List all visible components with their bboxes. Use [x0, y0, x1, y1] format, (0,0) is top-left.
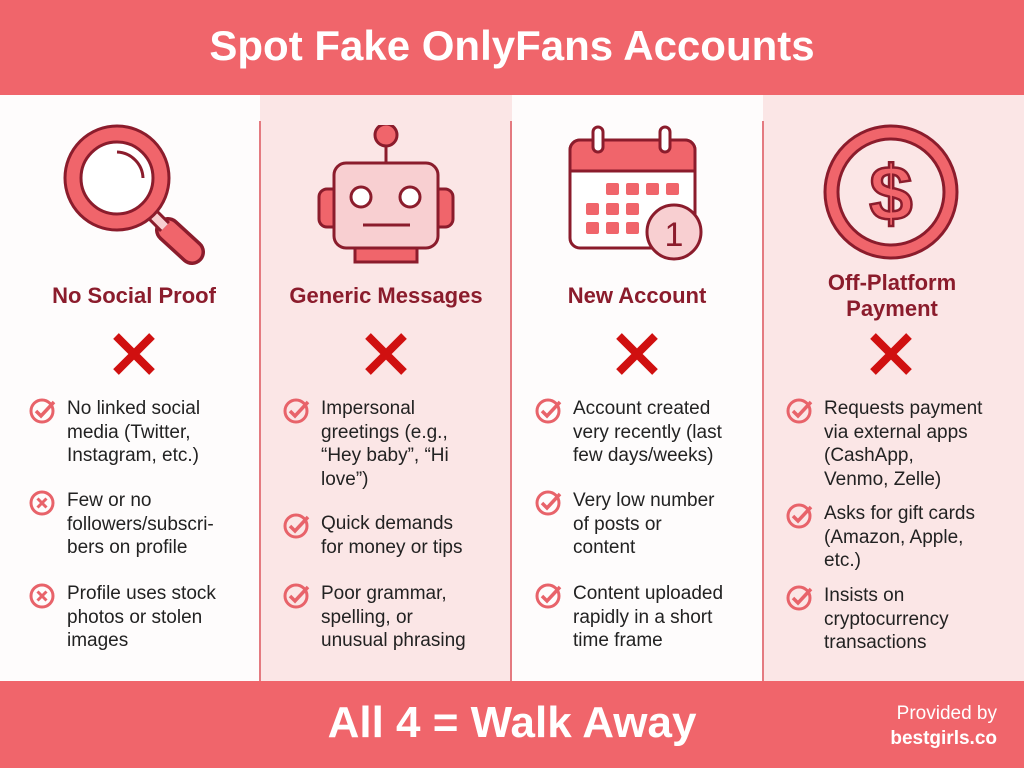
icon: robot — [318, 125, 454, 264]
bullets col 2: love”) — [321, 468, 369, 490]
text: unusual phrasing — [321, 630, 466, 651]
bullets col 2: greetings (e.g., — [321, 422, 448, 442]
header bar: Spot Fake OnlyFans Accounts — [209, 22, 815, 69]
text: Asks for gift cards — [824, 503, 975, 524]
footer slogan: All 4 = Walk Away — [328, 698, 696, 747]
bullets col 1: No linked social — [67, 398, 200, 419]
icon: X 4 — [870, 333, 912, 375]
heading: Off-Platform Payment — [828, 270, 956, 321]
bullets col 2: “Hey baby”, “Hi — [321, 445, 449, 466]
bullets col 3: very recently (last — [573, 422, 722, 442]
text: transactions — [824, 632, 926, 653]
credit — [890, 703, 997, 749]
header bar — [0, 0, 1024, 95]
bullets col 1: media (Twitter, — [67, 422, 191, 442]
heading: New Account: New Account — [568, 283, 706, 308]
text: etc.) — [824, 550, 861, 571]
text: content — [573, 537, 635, 558]
icon: calendar — [568, 126, 702, 260]
text: spelling, or — [321, 606, 413, 628]
text: of posts or — [573, 514, 662, 534]
bullets col 3 — [536, 398, 722, 466]
icon: X 3 — [616, 333, 658, 375]
text: followers/subscri- — [67, 514, 214, 534]
bullets col 3: few days/weeks) — [573, 445, 713, 466]
text: (Amazon, Apple, — [824, 526, 963, 548]
footer bar — [0, 681, 1024, 768]
icon: dollar coin — [824, 124, 958, 260]
text: Quick demands — [321, 513, 453, 534]
bullets col 2 — [284, 398, 449, 490]
bullets col 2: Impersonal — [321, 398, 415, 419]
icon: X 1 — [113, 333, 155, 375]
text: Insists on — [824, 585, 904, 606]
text: cryptocurrency — [824, 608, 949, 630]
text: for money or tips — [321, 536, 462, 558]
icon: dollar coin: $ — [869, 149, 913, 237]
bullets col 4 — [786, 398, 982, 490]
text: Very low number — [573, 490, 715, 511]
icon: calendar: 1 — [665, 216, 683, 254]
heading: No Social Proof: No Social Proof — [52, 283, 216, 308]
text: rapidly in a short — [573, 606, 712, 628]
text: Content uploaded — [573, 583, 723, 604]
bullets col 4: (CashApp, — [824, 445, 914, 466]
bullets col 3: Account created — [573, 398, 710, 419]
icon: X 2 — [365, 333, 407, 375]
text: images — [67, 630, 128, 651]
text: time frame — [573, 630, 663, 651]
bullets col 4: Venmo, Zelle) — [824, 468, 941, 490]
bullets col 1 — [30, 398, 200, 466]
bullets col 4: Requests payment — [824, 398, 982, 419]
text: Few or no — [67, 490, 151, 511]
heading: Off-Platform Payment: Off-Platform — [828, 270, 956, 295]
bullets col 4: via external apps — [824, 422, 968, 442]
heading: Generic Messages: Generic Messages — [289, 283, 483, 308]
text: Profile uses stock — [67, 583, 216, 604]
heading: Off-Platform Payment: Payment — [846, 296, 938, 321]
bullets col 1: Instagram, etc.) — [67, 445, 199, 466]
credit: Provided by — [897, 703, 997, 724]
icon: magnifier — [64, 124, 205, 265]
text: Poor grammar, — [321, 583, 447, 604]
text: photos or stolen — [67, 606, 202, 628]
text: bers on profile — [67, 537, 187, 558]
credit: bestgirls.co — [890, 728, 997, 749]
